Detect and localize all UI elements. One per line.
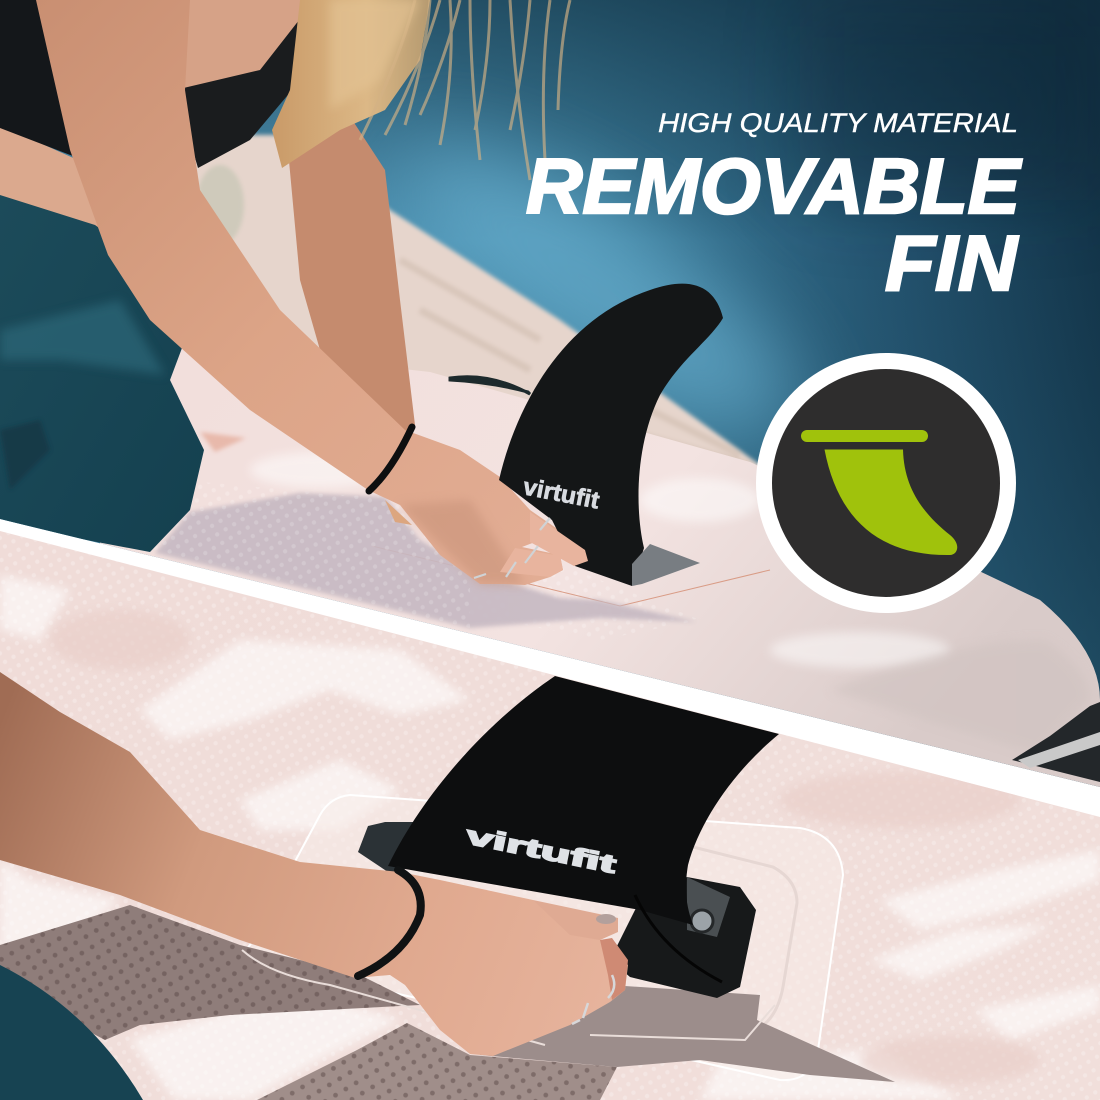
hair strands [360,0,570,180]
subtitle: HIGH QUALITY MATERIAL [658,108,1018,138]
top fin [499,284,723,586]
left valve base [358,822,425,880]
item dark foot [204,242,232,258]
heading [526,108,1022,307]
board surface [0,520,1100,1100]
front arm [36,0,588,585]
icon: fin shape [824,450,957,555]
fingertip [600,938,628,1000]
marble pattern [0,575,1100,1100]
lower shadow dimples [257,1023,617,1100]
board marble marks [250,452,950,668]
cast shadow on board [155,493,697,628]
thumbnail [596,914,616,924]
board strap [450,377,530,394]
left shadow dimples [0,905,420,1040]
panel: top photo [0,0,1100,800]
paddle board [100,335,1100,800]
black top right [185,22,298,168]
pink mark on board [200,432,246,452]
bracelet [369,427,412,491]
arm and hand [0,672,628,1056]
lower shadow [257,1023,617,1100]
ring [572,975,614,1024]
leggings [0,195,204,552]
torso skin [0,128,98,227]
badge disc [772,369,1000,597]
water highlight along dock [394,118,821,460]
fin base metal [632,544,700,586]
valve metal plate [687,877,730,937]
icon: fin base bar [801,430,928,442]
leggings fold [1,421,49,486]
hair tie bracelet [358,870,421,976]
panel: bottom photo [0,520,1100,1100]
fin logo: virtufit [521,473,602,515]
board rear shadow side [849,653,952,704]
top gradient over water [800,0,1100,200]
hair [272,0,430,168]
lower legging [0,965,143,1100]
right shadow [480,985,895,1082]
shadow dimples [155,493,470,628]
board seam [372,546,770,606]
fingertip under palm [385,500,412,525]
water shading [0,0,1100,800]
patch edge over shadow [242,950,775,1045]
item on dock [199,164,245,239]
dock [195,132,758,466]
chest skin [185,0,300,88]
badge: fin icon [756,353,1016,613]
handle lettering strip [1018,732,1100,768]
board handle [1012,702,1100,782]
fin logo: virtufit [464,821,620,879]
right valve base [610,877,756,998]
left shadow [0,905,420,1040]
dock planks [400,260,750,465]
black top left [0,0,78,158]
leggings highlight [0,300,165,375]
clear valve patch [248,795,843,1080]
hair shine [330,0,420,110]
dimple texture [0,520,1100,1100]
title line 2: FIN [885,219,1019,307]
water [0,0,1100,800]
thumb [533,900,618,940]
rings [474,518,550,578]
patch inner ring [600,847,797,1035]
hand shade [400,500,525,585]
fin leash cord [635,895,722,982]
title line 1: REMOVABLE [526,142,1022,230]
back arm [289,124,415,430]
valve bolt [691,910,713,932]
bottom fin [388,676,779,925]
badge ring [756,353,1016,613]
fingers [500,512,588,577]
board dimple texture [150,480,700,640]
pink marble shade [50,610,1040,1084]
